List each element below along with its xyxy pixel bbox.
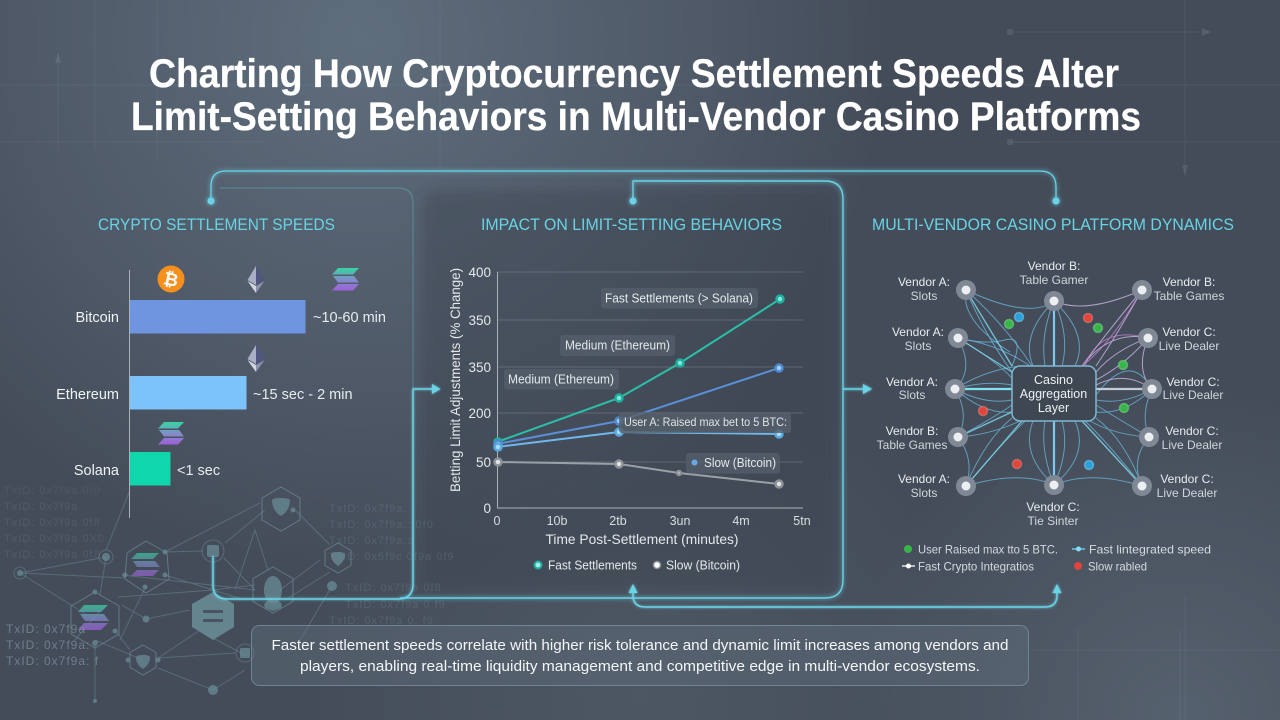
heading: multi-vendor: MULTI-VENDOR CASINO PLATFORM DYNAMICS <box>872 216 1234 234</box>
connector: panel 2 outline <box>400 181 843 598</box>
bar: bitcoin <box>75 300 386 334</box>
decorative transaction IDs: TxID: 0x7f9a 0 f9 <box>345 599 446 611</box>
decorative transaction IDs <box>4 485 455 668</box>
line chart: 5tn <box>793 514 811 528</box>
icon: ethereum top <box>248 266 264 293</box>
chart legend: Slow (Bitcoin) <box>666 558 740 572</box>
decorative transaction IDs: TxID: 0x7f9a: f <box>6 654 99 668</box>
line chart: 10b <box>547 514 567 528</box>
vendor labels: Vendor C: <box>1165 424 1219 438</box>
panel: impact on limit-setting behaviors <box>447 216 811 572</box>
decorative transaction IDs: TxID: 0x7f9a 0f0 <box>4 485 101 497</box>
vendor labels: Live Dealer <box>1157 486 1217 500</box>
line chart: 2tb <box>609 514 627 528</box>
icon: bitcoin <box>158 266 184 292</box>
chart legend: Fast Settlements <box>548 558 637 572</box>
line chart: 3un <box>670 514 690 528</box>
icon: bitcoin: ₿ <box>162 268 180 291</box>
callout: medium lower: Medium (Ethereum) <box>508 372 614 386</box>
bar: bitcoin: ~10-60 min <box>313 310 386 326</box>
vendor labels: Slots <box>899 388 925 402</box>
line chart <box>447 265 811 572</box>
panel: crypto settlement speeds <box>56 216 386 518</box>
line chart: 400 <box>468 265 491 280</box>
line chart: Time Post-Settlement (minutes) <box>546 531 738 547</box>
callout: user A: User A: Raised max bet to 5 BTC: <box>624 415 787 429</box>
callout: medium upper <box>560 335 675 356</box>
vendor labels: Table Games <box>1154 289 1224 303</box>
vendor labels: Vendor C: <box>1162 325 1216 339</box>
network legend: User Raised max tto 5 BTC. <box>918 542 1058 556</box>
network legend: Slow rabled <box>1088 560 1147 574</box>
network legend: Fast Crypto Integratios <box>918 560 1034 574</box>
callout: summary <box>252 626 1028 686</box>
center box: casino aggregation layer: Aggregation <box>1020 387 1087 401</box>
center box: casino aggregation layer <box>1012 366 1096 421</box>
decorative transaction IDs: TxID: 0x7f9a: <box>329 503 407 515</box>
network mesh <box>955 290 1152 486</box>
title: Limit-Setting Behaviors in Multi-Vendor Casino Platforms <box>131 95 1141 139</box>
bar: ethereum <box>56 376 353 410</box>
callout: summary: players, enabling real-time liquidity management and competitive edge in multi-vendor ecosystems. <box>300 659 980 675</box>
series: medium ethereum <box>494 364 782 448</box>
panel: multi-vendor casino platform dynamics <box>872 216 1234 574</box>
vendor labels: Vendor A: <box>886 375 938 389</box>
vendor labels: Tie Sinter <box>1028 514 1078 528</box>
callout: user A <box>619 412 791 433</box>
vendor nodes <box>945 280 1162 496</box>
line chart: 0 <box>483 501 491 516</box>
icon: ethereum middle <box>248 345 264 372</box>
callout: slow bitcoin: Slow (Bitcoin) <box>704 456 776 470</box>
callout: summary: Faster settlement speeds correlate with higher risk tolerance and dynamic limit increases among vendors and <box>272 638 1008 654</box>
network legend: Fast lintegrated speed <box>1089 542 1211 556</box>
line chart: 0 <box>494 514 501 528</box>
connector: top bracket <box>208 171 1060 204</box>
callout: fast settlements: Fast Settlements (> Solana) <box>605 292 753 306</box>
chart legend <box>534 558 740 572</box>
vendor labels: Slots <box>911 289 937 303</box>
callout: medium upper: Medium (Ethereum) <box>565 338 670 352</box>
decorative transaction IDs: TxID: 0x7f9a <box>6 622 86 636</box>
network legend <box>902 542 1211 574</box>
vendor labels: Slots <box>905 339 931 353</box>
decorative transaction IDs: TxID: 0x7f9a: <box>6 638 90 652</box>
line chart: 200 <box>468 406 491 421</box>
chart axis <box>128 270 130 518</box>
vendor labels: Vendor A: <box>892 325 944 339</box>
vendor labels: Table Games <box>877 438 947 452</box>
vendor labels: Vendor C: <box>1160 472 1214 486</box>
vendor labels: Vendor B: <box>1028 259 1080 273</box>
arrow: into chart panel <box>413 384 440 394</box>
icon: solana top <box>332 268 359 290</box>
line chart: 50 <box>476 455 491 470</box>
vendor labels: Live Dealer <box>1159 339 1219 353</box>
series: slow bitcoin <box>494 458 782 488</box>
icon: solana lower <box>158 422 184 444</box>
title <box>131 52 1141 139</box>
bar: bitcoin: Bitcoin <box>75 310 119 326</box>
decorative transaction IDs: TxID: 0x7f9a:a <box>329 535 415 547</box>
vendor labels: Live Dealer <box>1163 388 1223 402</box>
series: fast settlements <box>494 296 784 446</box>
bar: solana <box>74 452 220 486</box>
line chart: Betting Limit Adjustments (% Change) <box>447 268 463 492</box>
bar: ethereum: Ethereum <box>56 387 119 403</box>
decorative transaction IDs: TxID: 0x7f9a:: 0f0 <box>329 519 434 531</box>
vendor labels: Vendor C: <box>1026 500 1080 514</box>
series: light blue <box>494 428 782 450</box>
decorative transaction IDs: TxID: 0x5f9c 0f9a 0f9 <box>329 551 455 563</box>
callout: fast settlements <box>601 288 758 308</box>
vendor labels: Slots <box>911 486 937 500</box>
decorative transaction IDs: TxID: 0x7f9a 0f8 <box>4 549 101 561</box>
vendor labels: Live Dealer <box>1162 438 1222 452</box>
center box: casino aggregation layer: Layer <box>1038 401 1069 415</box>
vendor labels: Vendor A: <box>898 472 950 486</box>
arrow: into network panel <box>843 384 872 394</box>
callout: slow bitcoin <box>686 453 780 474</box>
decorative transaction IDs: TxID: 0x7f9a 0X0 <box>4 533 105 545</box>
heading: crypto settlement speeds: CRYPTO SETTLEMENT SPEEDS <box>98 216 335 234</box>
decorative transaction IDs: TxID: 0x7f9a 0f8 <box>345 582 442 594</box>
arrow: bottom bracket to chart and network <box>628 584 1062 607</box>
vendor labels: Vendor A: <box>898 275 950 289</box>
connector: panel 1 outline <box>213 188 413 599</box>
line chart: 4m <box>732 514 750 528</box>
vendor labels: Vendor C: <box>1166 375 1220 389</box>
bar: ethereum: ~15 sec - 2 min <box>253 387 353 403</box>
decorative transaction IDs: TxID: 0x7f9a <box>4 501 78 513</box>
vendor labels: Vendor B: <box>1163 275 1215 289</box>
heading: impact: IMPACT ON LIMIT-SETTING BEHAVIORS <box>481 216 782 234</box>
line chart: 350 <box>468 313 491 328</box>
decorative blockchain network <box>14 487 351 703</box>
panel background: impact panel <box>422 190 836 590</box>
bar: solana: <1 sec <box>177 463 220 479</box>
line chart: 350 <box>468 360 491 375</box>
decorative transaction IDs: TxID: 0x7f9a 0f8 <box>4 517 101 529</box>
center box: casino aggregation layer: Casino <box>1034 373 1073 387</box>
callout: medium lower <box>504 369 619 390</box>
vendor labels: Vendor B: <box>886 424 938 438</box>
decorative transaction IDs: TxID: 0x7f9a 0. f9 <box>329 615 434 627</box>
vendor labels: Table Gamer <box>1020 273 1088 287</box>
status markers <box>978 312 1128 470</box>
vendor labels <box>877 259 1224 528</box>
title: Charting How Cryptocurrency Settlement Speeds Alter <box>149 52 1119 96</box>
bar: solana: Solana <box>74 463 120 479</box>
